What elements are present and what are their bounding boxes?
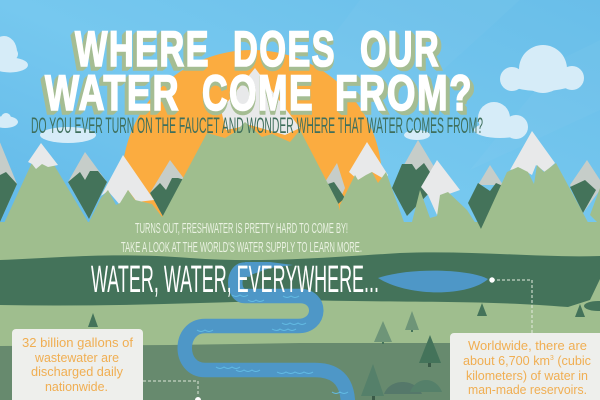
- tree: dark small: [477, 303, 487, 316]
- cloud: top left: [0, 36, 28, 72]
- bushes: [384, 301, 600, 394]
- callout: wastewater: 32 billion gallons of: [22, 335, 133, 350]
- mountain: center left dark: [150, 160, 185, 222]
- title: [45, 21, 473, 121]
- mountain: right dark three: [468, 165, 503, 229]
- dark green band: [0, 252, 600, 307]
- title word: FROM?: FROM?: [335, 65, 473, 121]
- cloud: small right: [404, 130, 430, 140]
- callout: reservoirs: [450, 333, 600, 400]
- intro text: TURNS OUT, FRESHWATER IS PRETTY HARD TO COME BY!: [135, 220, 348, 237]
- title word: COME: COME: [202, 65, 314, 121]
- mountain: center left white: [89, 155, 166, 222]
- callout: wastewater: discharged daily: [31, 364, 123, 379]
- callout: reservoirs: kilometers) of water in: [466, 368, 588, 383]
- mountain: left green: [0, 143, 88, 232]
- mountain: right white: [340, 142, 405, 225]
- tree: dark right: [575, 304, 585, 317]
- bush: right: [410, 380, 442, 392]
- mountain: far right green: [590, 188, 600, 225]
- tree: light two: [405, 311, 419, 332]
- callout: reservoirs: about 6,700 km: [463, 353, 553, 368]
- callout: reservoirs: 3: [550, 355, 554, 362]
- clouds: [0, 36, 584, 143]
- title word: WHERE: WHERE: [75, 21, 210, 77]
- green ground: [0, 222, 600, 400]
- sky background: [0, 0, 600, 260]
- callout: wastewater: wastewater are: [34, 350, 119, 365]
- cloud: middle right: [474, 102, 528, 139]
- title word: OUR: OUR: [360, 21, 440, 77]
- tree: far left: [88, 313, 98, 327]
- river ripples: [197, 295, 348, 394]
- lake: [378, 271, 488, 292]
- intro text: [121, 220, 362, 256]
- title word: WATER: WATER: [45, 65, 180, 121]
- mountain: far right dark: [570, 160, 600, 213]
- bush: left: [384, 382, 422, 394]
- mountain: right big: [481, 131, 592, 230]
- callout: wastewater: [12, 329, 143, 400]
- trees: [88, 303, 585, 400]
- front mountains: [0, 68, 600, 240]
- intro line two: TAKE A LOOK AT THE WORLD'S WATER SUPPLY TO LEARN MORE.: [121, 239, 362, 256]
- connector: lake to right box: [489, 277, 532, 334]
- cloud: top right: [500, 45, 584, 93]
- connector: left box: [143, 381, 201, 400]
- back mountains: [0, 135, 600, 229]
- mountain: far left dark: [0, 135, 17, 222]
- tree: light one: [374, 321, 392, 344]
- mountain: big center: [150, 68, 345, 240]
- tree: lower left: [361, 364, 384, 400]
- mountain: right dark two: [392, 140, 436, 216]
- sun: [122, 50, 382, 310]
- lower meadow band: [0, 343, 600, 400]
- mountain: right white two: [410, 160, 480, 230]
- cloud: behind subtitle: [40, 127, 96, 143]
- callout: reservoirs: Worldwide, there are: [468, 338, 587, 353]
- title word: DOES: DOES: [233, 21, 336, 77]
- river: [185, 262, 348, 400]
- mountain: left dark: [68, 152, 107, 219]
- tree: lower right: [419, 335, 441, 367]
- callout: reservoirs: (cubic: [554, 353, 591, 368]
- callout: reservoirs: man-made reservoirs.: [468, 382, 587, 397]
- bush: far right: [584, 301, 600, 311]
- callout: wastewater: nationwide.: [45, 379, 108, 394]
- cloud: small left: [0, 113, 18, 128]
- mountain: right dark one: [325, 163, 345, 204]
